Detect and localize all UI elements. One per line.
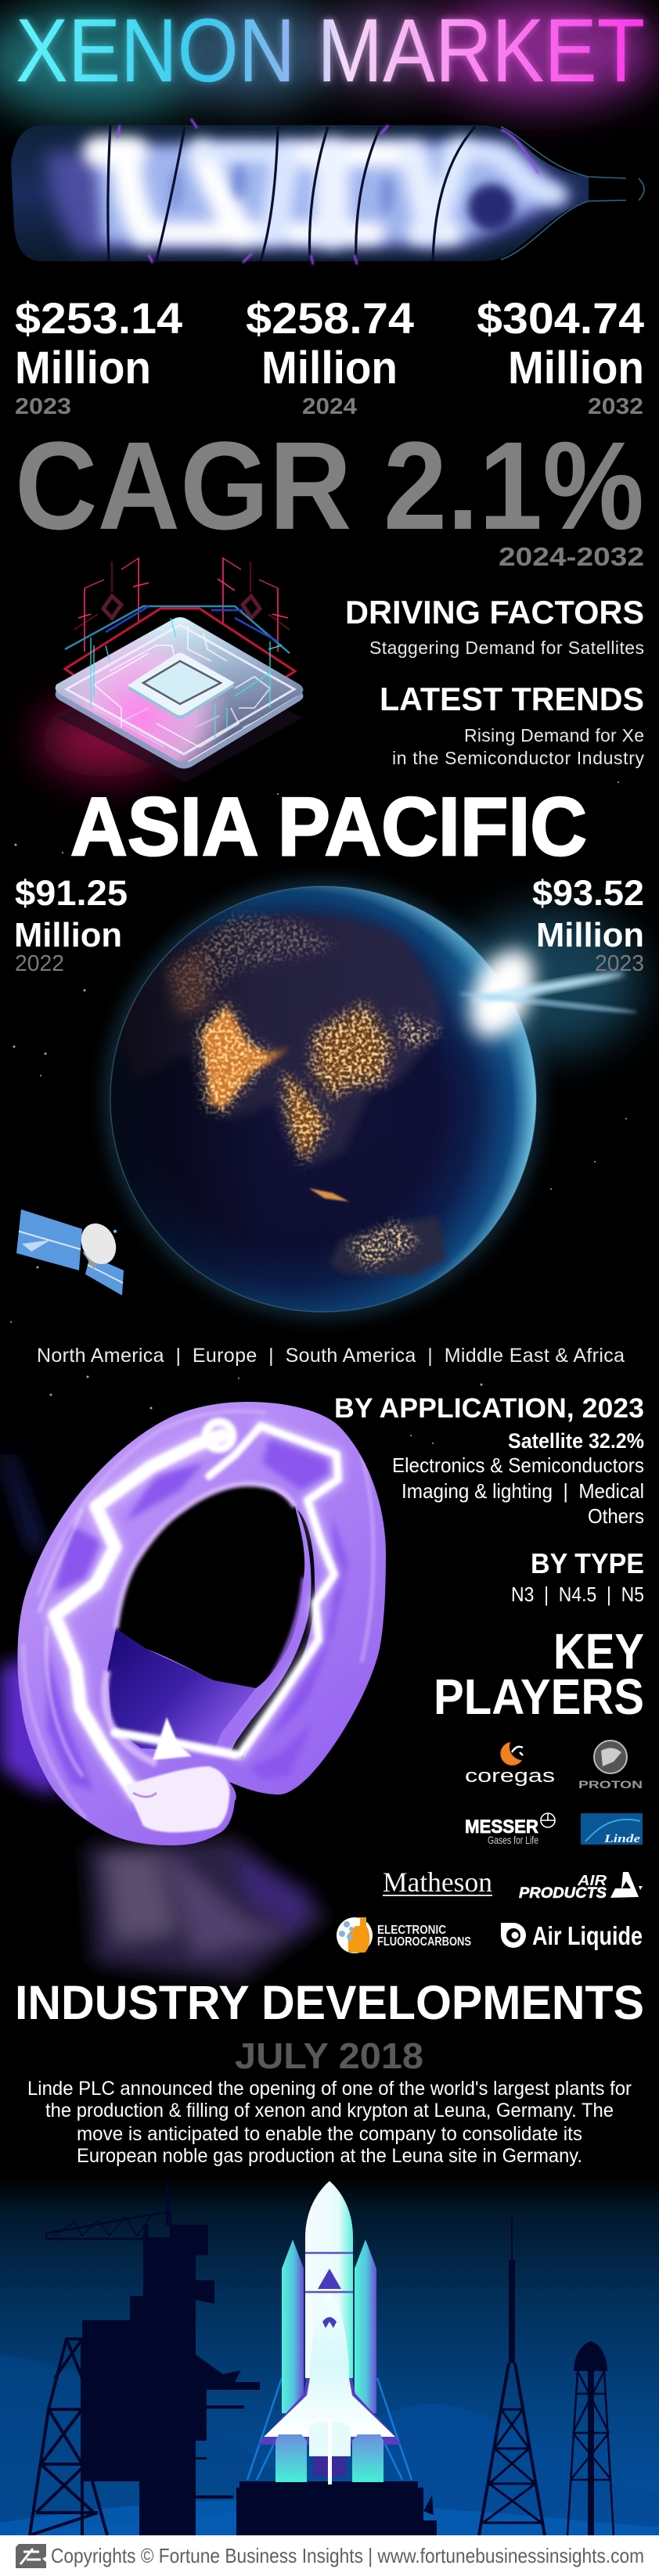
east asia lights [315,1008,387,1094]
heading: by type: BY TYPE [531,1547,644,1579]
footer [0,2535,659,2576]
stat 2023 [15,293,182,419]
lattice tower left [30,2339,107,2535]
australia [330,1216,446,1275]
regional stat 2023: 2023 [595,951,644,976]
heading: industry developments: INDUSTRY DEVELOPMENTS [15,1976,644,2029]
text: development description: Linde PLC announced the opening of one of the world's largest plants for [27,2078,632,2100]
hills [0,2355,659,2535]
stat 2032: 2032 [588,394,643,419]
sun flare [454,911,642,1052]
asia landmass [110,914,441,1166]
stat 2024: Million [261,343,398,393]
support beams [247,2378,412,2480]
text: development description: move is anticipated to enable the company to consolidate its [77,2123,582,2145]
ring reflection [0,1454,329,1979]
logo: messer: MESSER [465,1816,538,1838]
boosters [282,2240,376,2413]
CAGR period: 2024-2032 [499,542,644,571]
text: other regions: North America | Europe | South America | Middle East & Africa [37,1345,625,1367]
external tank [305,2181,353,2378]
text: type list: N3 | N4.5 | N5 [511,1583,644,1606]
stat 2032: $304.74 [477,293,644,343]
logo: linde: Linde [603,1833,640,1845]
regional stat 2022: Million [14,916,122,954]
logo: air products: AIR [577,1873,607,1888]
logo: electronic fluorocarbons: ELECTRONIC [377,1924,446,1937]
plasma bulb end [125,1766,229,1833]
stat 2023: 2023 [15,394,71,419]
stat 2023: $253.14 [15,293,182,343]
stat 2024: 2024 [302,394,357,419]
logo: messer: Gases for Life [488,1834,538,1846]
launch platform [236,2481,437,2535]
regional stat 2022: $91.25 [15,873,128,913]
circuit pillars [74,558,290,652]
background stars [10,781,627,1444]
logo: coregas [465,1742,555,1787]
indonesia and japan lights [309,1188,349,1202]
icon: fortune business insights logo [16,2544,46,2568]
text: development description [27,2078,632,2167]
title glow backdrop [0,0,657,117]
plasma filaments [39,1422,338,1795]
rocket launch scene [0,2177,659,2535]
sky [0,2177,659,2535]
stat 2023: Million [15,343,151,393]
text: application list: Satellite 32.2% [508,1429,644,1453]
text: development description: European noble gas production at the Leuna site in Germany. [77,2145,582,2167]
regional stat 2022: 2022 [15,951,64,976]
text: application list: Electronics & Semiconductors [392,1453,644,1477]
xenon glass bulb [11,119,644,264]
text: application list [392,1429,644,1528]
heading: driving factors: DRIVING FACTORS [345,594,644,631]
logo: messer [465,1813,555,1846]
heading: key players: PLAYERS [434,1669,644,1725]
stat 2032: Million [508,343,644,393]
plasma ring [0,1402,386,1979]
stat 2024: $258.74 [246,293,414,343]
orbiter [258,2269,402,2445]
logo: electronic fluorocarbons: FLUOROCARBONS [377,1935,471,1949]
icon: semiconductor chip [39,558,304,806]
ring lower inner area [107,1629,256,1751]
water tower [567,2341,614,2535]
australia lights [348,1222,419,1269]
text: latest trend detail: in the Semiconductor Industry [392,748,645,768]
heading: latest trends: LATEST TRENDS [380,681,644,717]
ring body [17,1402,386,1845]
logo: air products [519,1872,643,1902]
right antenna tower [479,2217,545,2535]
logo: electronic fluorocarbons [337,1917,471,1953]
regional stat 2023: Million [536,916,644,954]
engine pods [275,2420,384,2484]
logo: air liquide [501,1921,643,1950]
plasma glow [55,1426,338,1795]
date: july 2018: JULY 2018 [235,2035,423,2076]
text: application list: Imaging & lighting | Medical [402,1479,644,1503]
text: development description: the production & filling of xenon and krypton at Leuna, Germany. The [45,2100,614,2122]
logo: proton [578,1741,643,1791]
heading: key players: KEY [553,1623,644,1680]
heading: key players [434,1623,644,1725]
text: application list: Others [588,1504,644,1528]
india lights [202,1006,290,1108]
logo: linde [581,1813,643,1845]
text: latest trend detail [392,725,645,768]
logo: coregas: coregas [465,1766,555,1787]
heading: by application: BY APPLICATION, 2023 [334,1393,644,1424]
stat 2024 [246,293,414,419]
market size stats [15,293,644,419]
regional stat 2022 [14,873,128,976]
southeast asia lights [286,1073,324,1159]
ring hole [116,1484,304,1688]
heading: asia pacific: ASIA PACIFIC [70,781,587,873]
logo: air products: PRODUCTS [519,1885,607,1902]
stat 2032 [477,293,644,419]
dark inner sliver [229,1510,315,1759]
regional stat 2023: $93.52 [532,873,644,913]
icon: satellite [16,1209,124,1295]
text: driving factor detail: Staggering Demand for Satellites [369,638,644,658]
logo: matheson: Matheson [383,1866,492,1898]
regional stat 2023 [532,873,644,976]
ring glass highlights [105,1484,304,1764]
launch tower silhouette [46,2183,260,2535]
ring glass panels [23,1411,373,1819]
plasma star [153,1717,192,1760]
northern and central lights [168,915,337,1017]
text: latest trend detail: Rising Demand for Xe [464,725,644,745]
earth at night [104,880,642,1318]
logo: proton: PROTON [578,1778,643,1791]
